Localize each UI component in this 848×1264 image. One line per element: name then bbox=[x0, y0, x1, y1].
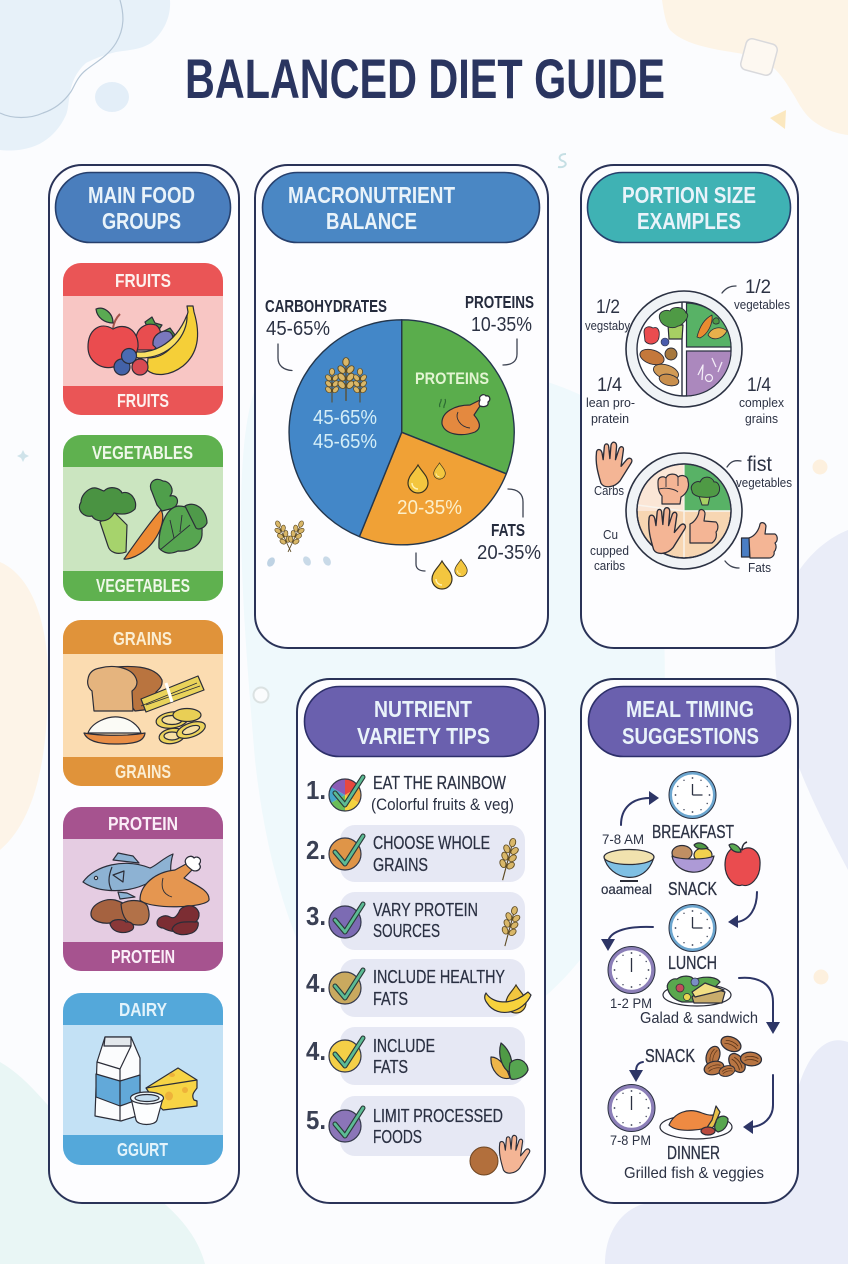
tip 4: include healthy fats: FATS bbox=[373, 988, 408, 1009]
label: fats bbox=[477, 489, 541, 564]
meal text: LUNCH bbox=[668, 953, 717, 973]
icon: thumbs up bbox=[690, 510, 718, 543]
card: grains: GRAINS bbox=[115, 761, 171, 782]
tip 6: limit processed foods: LIMIT PROCESSED bbox=[373, 1105, 503, 1126]
label: fats: FATS bbox=[491, 520, 525, 540]
meal text: 1-2 PM bbox=[610, 995, 652, 1011]
tip 1: eat the rainbow bbox=[306, 772, 514, 814]
clock: 1-2 pm bbox=[608, 946, 655, 994]
pie labels: 45-65% bbox=[313, 431, 377, 453]
arrows: meal flow bbox=[601, 791, 780, 1134]
plate labels: grains bbox=[745, 412, 778, 426]
heading: meal timing suggestions: SUGGESTIONS bbox=[622, 723, 759, 749]
tip 2: choose whole grains: CHOOSE WHOLE bbox=[373, 832, 490, 853]
card: vegetables: VEGETABLES bbox=[96, 575, 190, 596]
pie labels: PROTEINS bbox=[415, 369, 489, 388]
card: dairy: DAIRY bbox=[119, 999, 168, 1020]
card: dairy: GGURT bbox=[117, 1139, 169, 1160]
icon: wheat on carbohydrates bbox=[324, 358, 368, 402]
title: BALANCED DIET GUIDE bbox=[185, 47, 665, 110]
card: grains bbox=[63, 620, 223, 786]
tip 5: include fats bbox=[306, 1027, 528, 1085]
icon: thumbs up with cuff bbox=[742, 523, 777, 558]
plate labels: vegetables bbox=[734, 298, 790, 312]
heading: nutrient variety tips: NUTRIENT bbox=[374, 696, 472, 722]
panel: meal timing suggestions bbox=[581, 679, 798, 1203]
hand portion labels: Fats bbox=[748, 561, 771, 575]
icon: dairy bbox=[95, 1037, 197, 1124]
plate labels: pratein bbox=[591, 412, 629, 426]
card: vegetables: VEGETABLES bbox=[92, 442, 193, 463]
card: dairy bbox=[63, 993, 223, 1165]
heading: portion size examples: PORTION SIZE bbox=[622, 182, 756, 208]
pie labels: 20-35% bbox=[397, 497, 462, 519]
icon: purple bowl bbox=[672, 843, 714, 872]
tip 2: choose whole grains bbox=[306, 825, 525, 882]
meal text: SNACK bbox=[645, 1046, 695, 1066]
card: protein: PROTEIN bbox=[108, 813, 178, 834]
icon: grains bbox=[84, 666, 207, 746]
plate labels: 1/4 bbox=[747, 375, 771, 396]
heading: meal timing suggestions: MEAL TIMING bbox=[626, 696, 754, 722]
meal text bbox=[601, 822, 764, 1182]
card: grains: GRAINS bbox=[113, 628, 172, 649]
tip 3: vary protein sources bbox=[306, 892, 525, 950]
heading: macronutrient balance: MACRONUTRIENT bbox=[288, 182, 455, 208]
meal text: 7-8 PM bbox=[610, 1132, 651, 1148]
hand portion labels: caribs bbox=[594, 559, 625, 573]
tip 2: choose whole grains: GRAINS bbox=[373, 854, 428, 875]
card: fruits: FRUITS bbox=[115, 270, 171, 291]
plate labels bbox=[585, 277, 790, 426]
icon: vegetables bbox=[79, 479, 207, 559]
heading: nutrient variety tips bbox=[304, 686, 538, 756]
clock: breakfast bbox=[669, 772, 716, 818]
plate labels: 1/2 bbox=[596, 297, 620, 318]
hand portion labels: Cu bbox=[603, 528, 618, 542]
card: fruits: FRUITS bbox=[117, 390, 169, 411]
pie labels bbox=[313, 369, 489, 519]
tip 3: vary protein sources: SOURCES bbox=[373, 920, 440, 941]
icon: roast chicken bbox=[439, 395, 490, 435]
plate labels: 1/2 bbox=[745, 277, 771, 298]
tip 6: limit processed foods: FOODS bbox=[373, 1126, 422, 1147]
label: carbohydrates bbox=[265, 296, 387, 370]
hand portion labels: fist bbox=[747, 453, 772, 476]
meal text: Grilled fish & veggies bbox=[624, 1165, 764, 1182]
label: proteins: PROTEINS bbox=[465, 292, 534, 312]
tip 5: include fats: 4. bbox=[306, 1036, 326, 1066]
meal text: Galad & sandwich bbox=[640, 1010, 758, 1027]
heading: portion size examples bbox=[588, 172, 790, 242]
tip 5: include fats: FATS bbox=[373, 1056, 408, 1077]
label: proteins: 10-35% bbox=[471, 314, 532, 336]
icon: broccoli bbox=[691, 477, 720, 505]
meal text: 7-8 AM bbox=[602, 831, 644, 847]
hand portion labels: vegetables bbox=[736, 476, 792, 490]
clock: lunch bbox=[669, 904, 716, 952]
icon: fish dinner plate bbox=[660, 1106, 732, 1139]
pie labels: 45-65% bbox=[313, 407, 377, 429]
icon: nuts bbox=[703, 1033, 762, 1078]
icon: oil drops in pie bbox=[408, 463, 445, 493]
label: proteins bbox=[465, 292, 534, 365]
plate diagram: food portions bbox=[626, 291, 742, 407]
pie chart bbox=[289, 320, 514, 545]
tip 1: eat the rainbow: 1. bbox=[306, 775, 326, 805]
icon: open hand bbox=[649, 508, 685, 553]
tip 1: eat the rainbow: EAT THE RAINBOW bbox=[373, 772, 506, 793]
heading: nutrient variety tips: VARIETY TIPS bbox=[357, 723, 490, 749]
heading: main food groups: GROUPS bbox=[102, 208, 181, 234]
icon: oatmeal bowl bbox=[604, 850, 654, 881]
tip 3: vary protein sources: 3. bbox=[306, 901, 326, 931]
plate labels: lean pro- bbox=[586, 396, 635, 410]
plate labels: complex bbox=[739, 396, 785, 410]
icon: raised hand bbox=[596, 442, 632, 487]
icon: fruits bbox=[88, 306, 198, 375]
meal text: BREAKFAST bbox=[652, 822, 734, 842]
panel: portion size examples bbox=[581, 165, 798, 648]
card: protein: PROTEIN bbox=[111, 946, 175, 967]
clock: 7-8 pm bbox=[608, 1084, 655, 1132]
plate labels: vegstaby bbox=[585, 319, 631, 333]
panel: nutrient variety tips bbox=[297, 679, 545, 1203]
tip 1: eat the rainbow: (Colorful fruits & veg) bbox=[371, 795, 514, 814]
hand portion labels bbox=[590, 453, 792, 575]
tip 4: include healthy fats: INCLUDE HEALTHY bbox=[373, 966, 505, 987]
icon: fist bbox=[658, 474, 689, 504]
icon: apple bbox=[725, 842, 760, 886]
tip 6: limit processed foods: 5. bbox=[306, 1105, 326, 1135]
card: fruits bbox=[63, 263, 223, 415]
card: vegetables bbox=[63, 435, 223, 601]
heading: portion size examples: EXAMPLES bbox=[637, 208, 741, 234]
heading: macronutrient balance bbox=[262, 172, 540, 242]
meal text: DINNER bbox=[667, 1143, 720, 1163]
label: carbohydrates: 45-65% bbox=[266, 318, 330, 340]
plate labels: 1/4 bbox=[597, 375, 622, 396]
tip 3: vary protein sources: VARY PROTEIN bbox=[373, 899, 478, 920]
panel: macronutrient balance bbox=[255, 165, 548, 648]
icon: wheat decoration bbox=[265, 518, 333, 568]
heading: meal timing suggestions bbox=[588, 686, 790, 756]
plate diagram: hand portions bbox=[626, 453, 742, 569]
panel: main food groups bbox=[49, 165, 239, 1203]
tip 2: choose whole grains: 2. bbox=[306, 835, 326, 865]
label: carbohydrates: CARBOHYDRATES bbox=[265, 296, 387, 316]
tip 4: include healthy fats bbox=[306, 959, 531, 1017]
icon: oil drops with connector bbox=[416, 553, 467, 589]
card: protein bbox=[63, 807, 223, 971]
heading: main food groups: MAIN FOOD bbox=[88, 182, 195, 208]
tip 5: include fats: INCLUDE bbox=[373, 1035, 435, 1056]
hand portion labels: cupped bbox=[590, 544, 629, 558]
tip 6: limit processed foods bbox=[306, 1096, 530, 1175]
icon: plate foods bbox=[638, 307, 727, 388]
icon: salad and sandwich plate bbox=[663, 976, 731, 1006]
hand portion labels: Carbs bbox=[594, 484, 624, 498]
meal text: SNACK bbox=[668, 879, 717, 899]
icon: protein bbox=[83, 853, 209, 935]
heading: macronutrient balance: BALANCE bbox=[326, 208, 417, 234]
heading: main food groups bbox=[56, 172, 230, 242]
meal text: oaameal bbox=[601, 881, 652, 897]
tip 4: include healthy fats: 4. bbox=[306, 968, 326, 998]
label: fats: 20-35% bbox=[477, 542, 541, 564]
